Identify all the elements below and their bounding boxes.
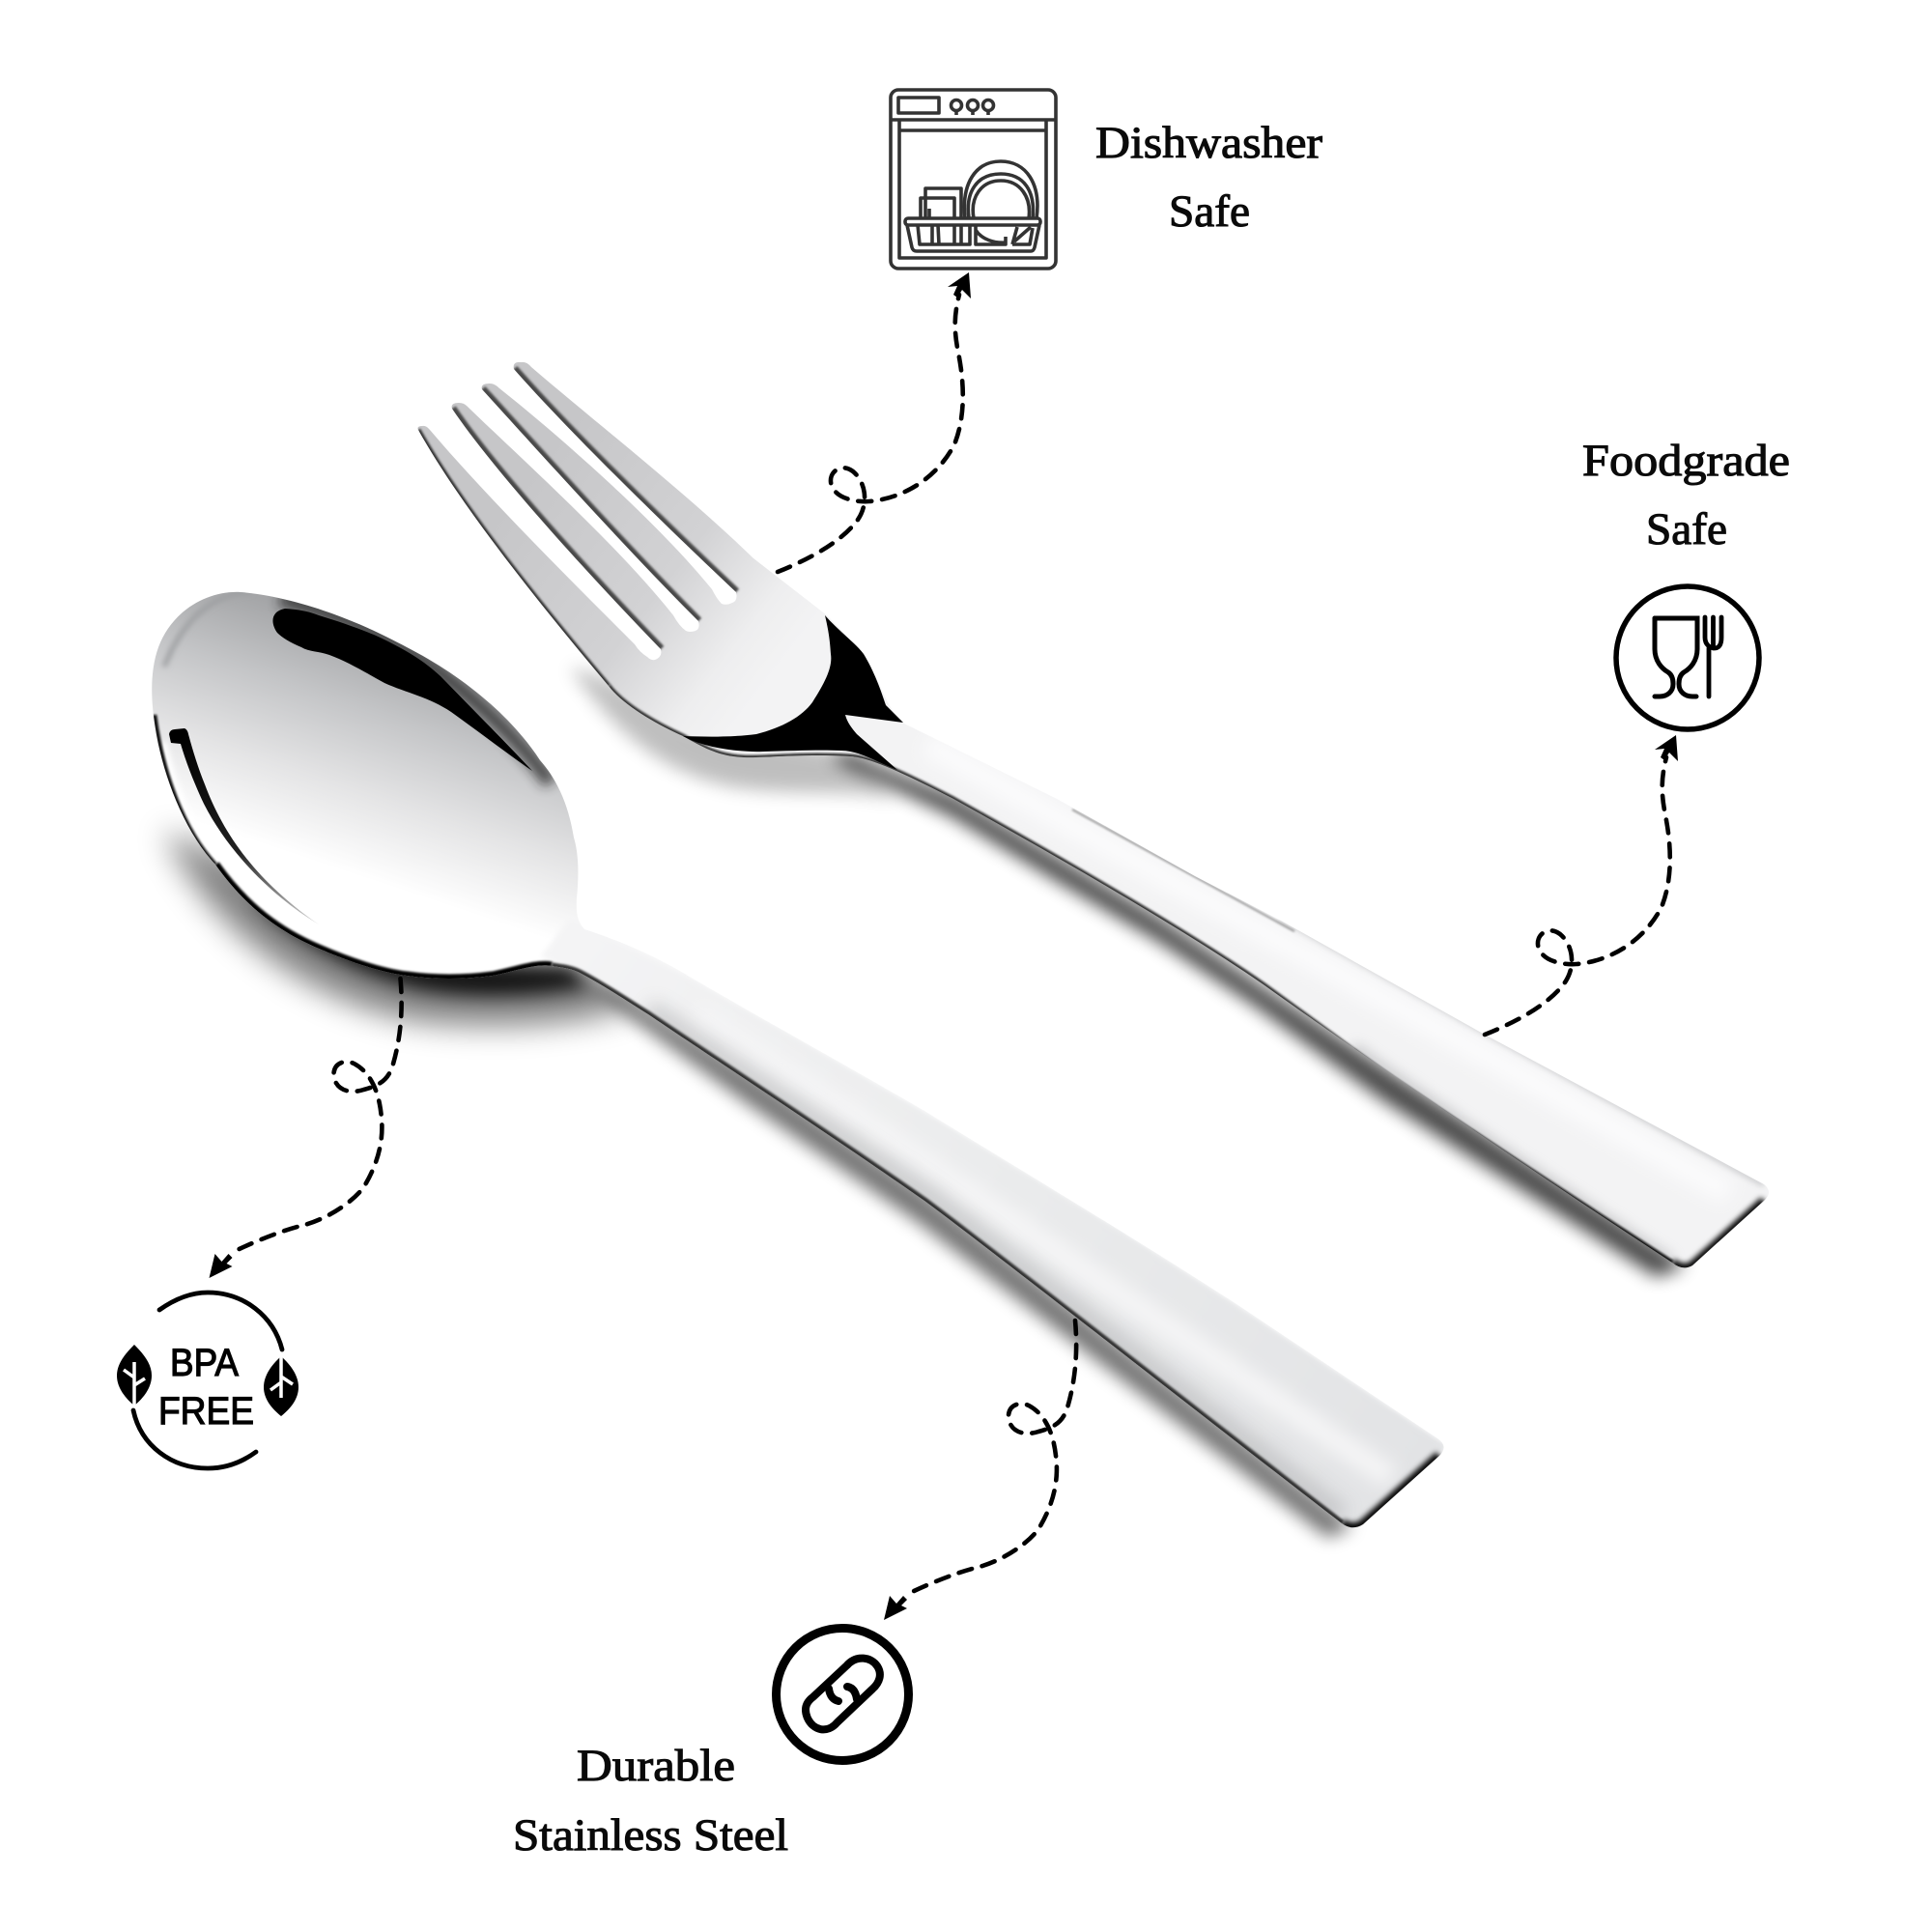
label: Durable Stainless Steel: Stainless Steel xyxy=(513,1810,788,1861)
durable callout xyxy=(513,1321,1076,1861)
label: Foodgrade Safe: Foodgrade xyxy=(1582,436,1790,486)
fork body xyxy=(417,362,1769,1267)
label: Durable Stainless Steel xyxy=(513,1741,788,1861)
arrow: fork to dishwasher xyxy=(778,272,971,572)
arrow: fork handle to foodgrade xyxy=(1485,735,1678,1035)
fork xyxy=(417,362,1769,1277)
arrow: spoon to BPA free xyxy=(209,979,402,1278)
label: Foodgrade Safe xyxy=(1582,436,1790,554)
spoon shading xyxy=(155,591,1449,1536)
icon: food safe glass and fork xyxy=(1616,586,1759,729)
fork handle shadow xyxy=(831,753,1686,1277)
foodgrade callout xyxy=(1485,436,1790,1035)
icon: BPA free: BPA xyxy=(170,1342,239,1384)
icon: BPA free: FREE xyxy=(158,1390,254,1433)
label: Dishwasher Safe: Safe xyxy=(1169,186,1250,237)
dishwasher callout xyxy=(778,90,1322,572)
spoon black reflection xyxy=(272,609,532,771)
spoon xyxy=(152,591,1449,1538)
BPA free callout xyxy=(117,979,402,1468)
label: Dishwasher Safe xyxy=(1095,118,1322,237)
fork neck black reflection xyxy=(683,615,903,770)
spoon body xyxy=(152,592,1444,1527)
spoon handle shadow xyxy=(580,980,1352,1538)
label: Foodgrade Safe: Safe xyxy=(1646,504,1727,554)
fork head shadow xyxy=(570,667,898,802)
spoon hook reflection xyxy=(169,728,319,924)
icon: dishwasher xyxy=(891,90,1056,269)
icon: chain link xyxy=(777,1629,908,1760)
spoon bowl shadow, wide xyxy=(164,831,628,1026)
label: Durable Stainless Steel: Durable xyxy=(577,1741,735,1791)
fork shading xyxy=(418,369,1764,1267)
spoon bowl shadow, dark core xyxy=(251,898,589,996)
label: Dishwasher Safe: Dishwasher xyxy=(1095,118,1322,168)
arrow: spoon handle to durable xyxy=(884,1321,1076,1620)
icon: BPA free xyxy=(117,1293,298,1468)
